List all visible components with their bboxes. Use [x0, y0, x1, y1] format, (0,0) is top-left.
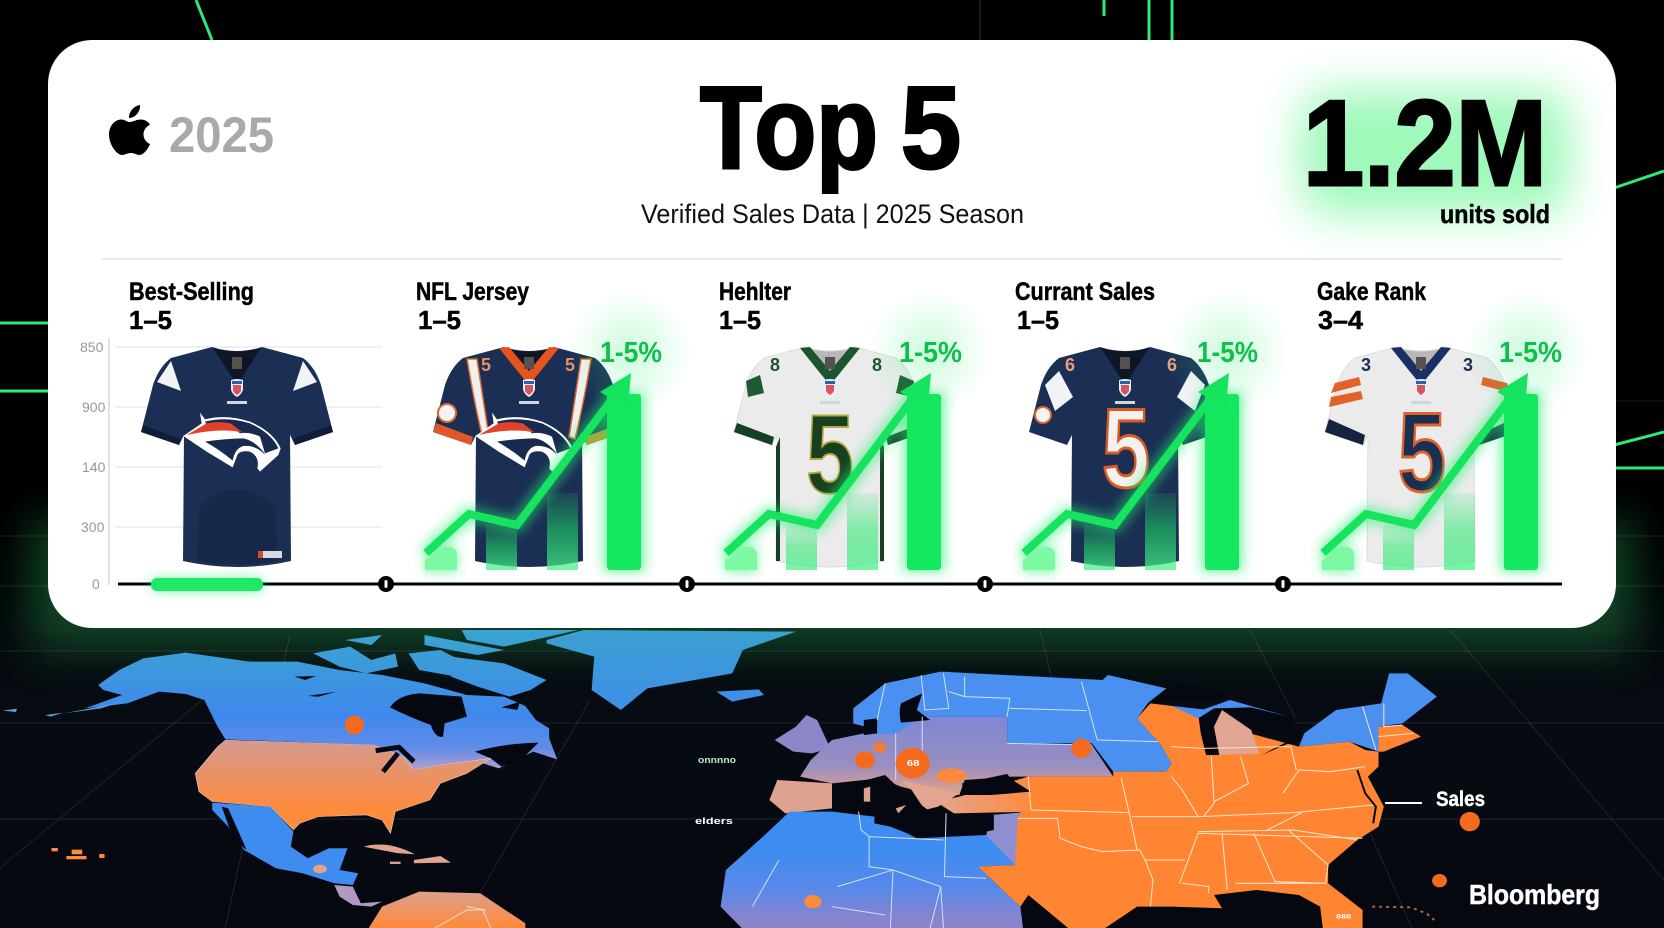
- marker: Africa: [804, 895, 821, 908]
- chart axis: 0: [92, 576, 100, 592]
- small map label upper: onnnno: [698, 755, 737, 765]
- jersey 3: white with green 5: 8: [770, 355, 780, 375]
- chart 2: growth overlay: [425, 290, 692, 572]
- Europe: [800, 717, 1113, 795]
- jersey 4: navy with white 5: 6: [1167, 355, 1177, 375]
- Central America: [334, 885, 382, 907]
- lakes: [1148, 685, 1304, 755]
- marker: eastern Europe: [937, 768, 966, 783]
- heading 1: [129, 278, 254, 335]
- world map: [3, 630, 1600, 928]
- chart 4: growth overlay: 1-5%: [1197, 337, 1258, 369]
- jersey 4: navy with white 5: 5: [1102, 386, 1150, 511]
- Africa borders: [752, 812, 986, 928]
- chart 3: growth overlay: [725, 290, 992, 572]
- title: 5: [901, 62, 961, 193]
- jersey 2: navy with orange trim: [433, 347, 625, 567]
- column headings: [129, 278, 1426, 335]
- jersey 3: white with green 5: 8: [872, 355, 882, 375]
- Iberia: [769, 780, 832, 813]
- header: [109, 62, 1570, 229]
- Sales callout: Sales: [1436, 788, 1485, 811]
- Mexico: [212, 803, 358, 885]
- jersey 3: white with green 5: [734, 347, 926, 567]
- heading 1: 1–5: [129, 305, 172, 335]
- map: Americas and Greenland: [3, 630, 832, 928]
- progress pill: [151, 578, 263, 591]
- New England orange: [1379, 725, 1421, 752]
- United States west: [195, 740, 491, 833]
- heading 2: 1–5: [418, 305, 461, 335]
- stat glow: [1300, 90, 1570, 215]
- jersey 4: navy with white 5: [1029, 347, 1221, 567]
- North Africa: [721, 812, 1023, 928]
- heading 5: 3–4: [1318, 305, 1364, 335]
- icon: apple logo: [109, 105, 150, 155]
- Arabia: [986, 813, 1020, 865]
- Greenland: [547, 630, 796, 710]
- heading 5: [1317, 278, 1426, 335]
- chart axis: [80, 338, 382, 592]
- Black Sea: [962, 774, 1031, 795]
- panel: main white card: [48, 40, 1616, 628]
- heading 2: [416, 278, 529, 335]
- state border lines: [1018, 703, 1413, 907]
- Sales callout: [1385, 788, 1485, 811]
- subtitle: Verified Sales Data | 2025 Season: [641, 199, 1024, 229]
- stat: units sold: units sold: [1440, 199, 1550, 229]
- timeline: [118, 576, 1562, 592]
- northern state lines: [877, 673, 1158, 780]
- North Sea notch: [864, 718, 877, 735]
- timeline markers: [378, 576, 1291, 592]
- jersey 2: navy with orange trim: 5: [565, 355, 575, 375]
- jersey 4: navy with white 5: 6: [1065, 355, 1075, 375]
- title: Top: [700, 62, 878, 193]
- Chesapeake: [1357, 770, 1376, 823]
- Baltic Sea: [900, 693, 930, 723]
- Arctic islands: [313, 630, 578, 697]
- Florida tag: 888: [1336, 913, 1352, 920]
- Baja gulf: [222, 807, 247, 850]
- chart axis: 140: [82, 459, 106, 475]
- heading 4: [1015, 278, 1155, 335]
- jersey 3: white with green 5: 5: [806, 392, 854, 517]
- chart 5: growth overlay: [1322, 290, 1589, 572]
- jersey 5: white with navy 5: 3: [1463, 355, 1473, 375]
- Bahamas dots: [1372, 907, 1434, 920]
- northern blue region: [853, 672, 1172, 772]
- Canada and Alaska: [85, 653, 557, 770]
- UK: [775, 715, 830, 753]
- marker: Atlantic: [1460, 812, 1480, 831]
- chart 4: growth overlay: [1023, 290, 1290, 572]
- marker: north-west Europe: [873, 742, 887, 753]
- marker: north Europe: [1071, 739, 1091, 758]
- Hudson Bay: [294, 676, 520, 737]
- jersey 5: white with navy 5: 3: [1361, 355, 1371, 375]
- marker: Canada: [345, 716, 364, 734]
- eastern US orange region: [978, 703, 1384, 928]
- Iceland: [716, 689, 764, 702]
- heading 2: NFL Jersey: [416, 278, 529, 306]
- marker: west Europe: [855, 751, 875, 769]
- chart 2: growth overlay: 1-5%: [600, 337, 662, 369]
- Italy: [864, 787, 906, 813]
- Mediterranean: [832, 775, 994, 838]
- chart axis: 900: [82, 399, 106, 415]
- small map label lower: elders: [695, 816, 733, 826]
- heading 4: 1–5: [1017, 305, 1059, 335]
- marker: south Atlantic: [1432, 874, 1447, 887]
- northeast blue region: [1299, 673, 1437, 752]
- Hawaii: [51, 848, 105, 859]
- marker: central Europe: [896, 748, 930, 779]
- Aleutians: [3, 702, 122, 717]
- Bloomberg logo: Bloomberg: [1469, 879, 1600, 910]
- jersey 5: white with navy 5: 5: [1398, 390, 1446, 515]
- heading 3: 1–5: [719, 305, 761, 335]
- heading 5: Gake Rank: [1317, 278, 1426, 306]
- heading 4: Currant Sales: [1015, 278, 1155, 306]
- year: 2025: [169, 107, 274, 163]
- map: Europe, Africa and eastern US: [721, 672, 1480, 928]
- jersey 5: white with navy 5: [1325, 347, 1517, 567]
- heading 1: Best-Selling: [129, 278, 254, 306]
- marker: central Europe: 68: [907, 759, 920, 768]
- chart axis: 300: [81, 519, 105, 535]
- Turkey: [935, 777, 1031, 813]
- Great Lakes detail: [376, 747, 414, 772]
- chart axis: 850: [80, 339, 104, 355]
- chart 3: growth overlay: 1-5%: [899, 337, 962, 369]
- jersey 1: navy with eagle: [141, 347, 333, 567]
- jersey 2: navy with orange trim: 5: [481, 355, 491, 375]
- South America: [369, 892, 525, 928]
- heading 3: [719, 278, 791, 335]
- heading 3: Hehlter: [719, 278, 791, 306]
- Michigan: [1214, 710, 1259, 755]
- card green glow: [30, 520, 1634, 650]
- chart 5: growth overlay: 1-5%: [1499, 337, 1562, 369]
- Balkans: [901, 780, 959, 810]
- Gulf of St Lawrence: [475, 743, 539, 767]
- Caribbean islands: [313, 845, 451, 873]
- upper Michigan: [1172, 700, 1288, 718]
- stat: units sold: 1.2M: [1303, 75, 1547, 211]
